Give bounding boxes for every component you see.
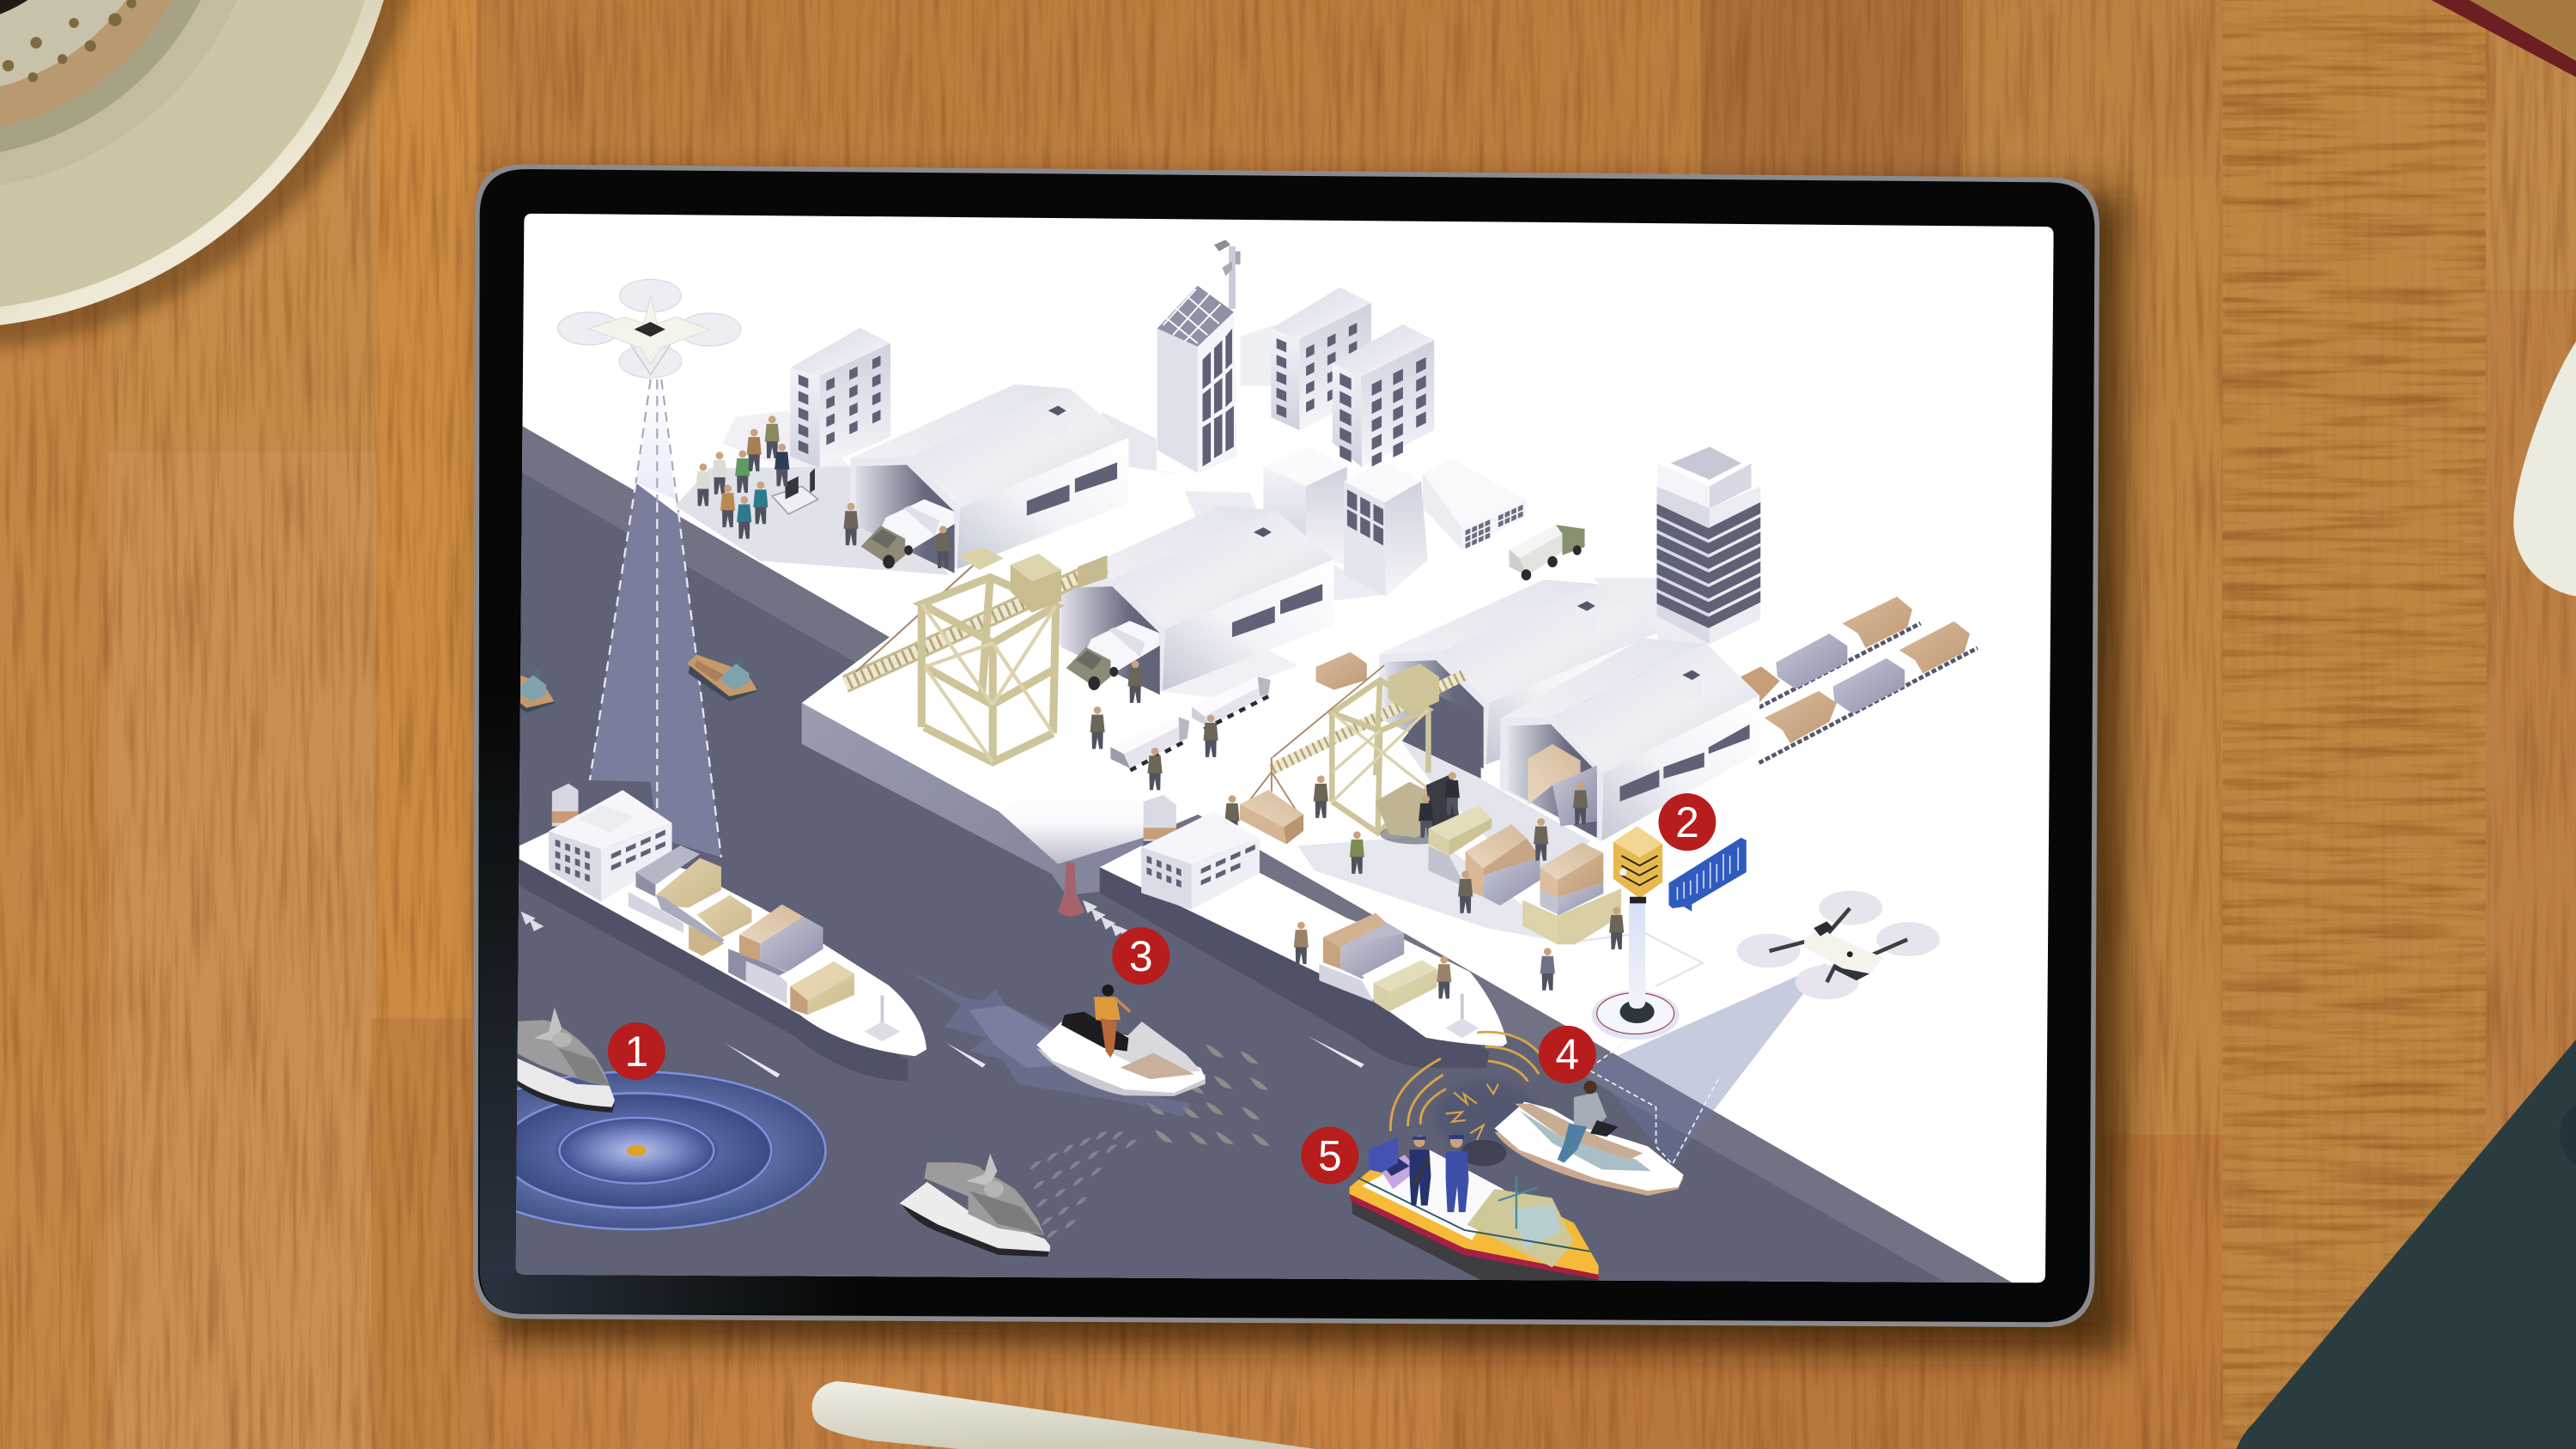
military vehicle and guards (1375, 773, 1460, 844)
rider jet ski (1036, 985, 1206, 1096)
shadow cast by bowl (0, 0, 422, 350)
signal arcs (1390, 1032, 1541, 1130)
ceramic bowl and drink (0, 0, 403, 329)
fish schools (1030, 1045, 1270, 1239)
white trailer truck 2 (1110, 717, 1189, 770)
voice speech bubble (1668, 838, 1747, 912)
warehouse 2 (1055, 506, 1334, 694)
flow arrows, left edge (521, 912, 544, 931)
microphone head (1613, 826, 1662, 903)
cargo train (1741, 597, 1978, 763)
number badge 4: 4 (1555, 1031, 1579, 1079)
drone beam dashed lines on water (590, 483, 721, 858)
hanging crate (1240, 790, 1303, 844)
dark green notebook, bottom right (2236, 1040, 2576, 1449)
number badge 2: 2 (1675, 798, 1699, 846)
wake streaks (725, 1036, 1364, 1077)
tablet body (473, 164, 2099, 1327)
quadcopter drone, right (1737, 891, 1940, 999)
solar office tower with camera mast (1157, 239, 1241, 473)
truck in warehouse 2 (1066, 621, 1160, 690)
number badge 5: 5 (1318, 1131, 1342, 1179)
water (516, 426, 2013, 1282)
drone beam on land (635, 380, 675, 500)
sonar rings (447, 1071, 825, 1229)
sonar jet ski, left edge (513, 1008, 615, 1113)
warehouse 3 (1379, 579, 1657, 779)
ground shadows (675, 325, 1709, 944)
number badge 2 (1658, 793, 1716, 851)
tablet screen with port illustration (447, 197, 2070, 1314)
white pebble object, right edge (2513, 342, 2576, 597)
crane 2 top cargo (1316, 652, 1439, 714)
deep water (493, 455, 1971, 1314)
grey jet ski (900, 1154, 1050, 1257)
jet ski wake (911, 972, 1191, 1117)
harbour pier side faces (802, 703, 1144, 895)
crate stacks (1428, 806, 1621, 944)
crane 1 machine housing (957, 547, 1108, 613)
crane 1 (843, 558, 1108, 762)
small patrol boat, left edge (484, 666, 555, 712)
buoy (1058, 863, 1084, 917)
number badge 3: 3 (1129, 932, 1153, 980)
microphone pole (1629, 900, 1645, 1009)
annex building block A (1263, 467, 1347, 565)
dock workers (843, 503, 1624, 991)
white trailer truck 1 (1192, 676, 1271, 730)
drone beam dashed lines on land (635, 379, 678, 512)
number badge 4 (1539, 1026, 1596, 1083)
microphone pole base (1592, 991, 1680, 1040)
surveillance drone beam (1590, 963, 1827, 1164)
jet ski 4 with rider (1494, 1081, 1684, 1196)
annex building block B with window grid (1344, 462, 1428, 597)
annex building low block (1423, 474, 1527, 549)
beam dashed frame (1590, 1005, 1720, 1164)
cargo ship 2 (1100, 795, 1507, 1046)
survey drone, top left (558, 279, 741, 378)
truck in warehouse 1 (861, 500, 955, 568)
red book corner, top right (2432, 0, 2576, 77)
cargo ship 1 (519, 784, 927, 1056)
crane 2 (1249, 665, 1463, 833)
ground square under mic pole (1560, 933, 1703, 986)
building: front apartment block (1333, 324, 1434, 468)
number badge 1: 1 (625, 1028, 648, 1076)
cargo ship 2 hull shadow (1100, 867, 1489, 1068)
small patrol boat (687, 654, 757, 701)
warehouse 4 (1500, 639, 1759, 841)
number badge 5 (1301, 1127, 1358, 1185)
response team and control desk (696, 415, 818, 539)
number badge 1 (608, 1022, 665, 1080)
cargo ship 1 hull shadow (509, 846, 908, 1081)
number badge 3 (1112, 927, 1170, 985)
pier platform top (802, 637, 1199, 864)
jamming haze and lightning (1434, 1081, 1540, 1167)
screen white ground (493, 197, 2070, 1298)
flow arrows from buoy (1083, 900, 1133, 938)
striped tower (1649, 440, 1768, 644)
drone beam on water (590, 483, 721, 858)
stylus pen (812, 1381, 1324, 1449)
delivery truck, green cab (1510, 524, 1585, 580)
patrol boat with officers (1350, 1135, 1599, 1282)
tablet shadow (493, 180, 2123, 1354)
building: back apartment block (1271, 288, 1371, 430)
warehouse 1 (850, 385, 1128, 573)
building: left apartment block (790, 328, 890, 468)
